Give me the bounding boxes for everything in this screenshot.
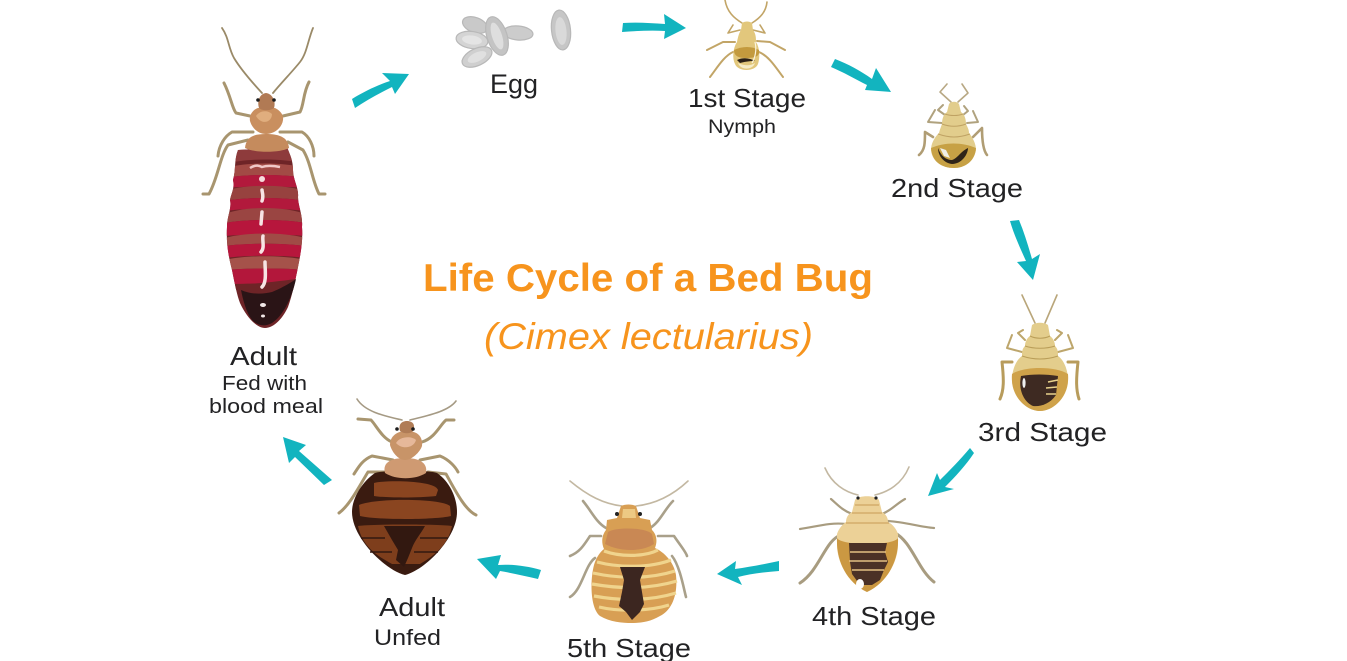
label: 3rd Stage: 3rd Stage — [978, 417, 1107, 447]
label: 2nd Stage: 2nd Stage — [891, 173, 1023, 203]
stage: 5th stage — [567, 481, 691, 661]
label: Adult: Adult — [379, 592, 446, 622]
arrow: 3rd stage to 4th stage — [928, 448, 974, 496]
stage: egg — [455, 9, 573, 99]
label: Unfed: Unfed — [374, 625, 441, 650]
stage: 3rd stage — [978, 295, 1107, 447]
stage: 2nd stage — [891, 84, 1023, 203]
label: Egg: Egg — [490, 69, 538, 99]
arrow: egg to 1st stage — [622, 14, 686, 39]
icon: egg cluster and single egg — [455, 9, 573, 71]
icon: unfed adult bed bug — [339, 399, 476, 575]
icon: 5th stage nymph — [570, 481, 688, 623]
label: 1st Stage: 1st Stage — [688, 83, 806, 113]
label: Nymph: Nymph — [708, 117, 776, 138]
label: blood meal: blood meal — [209, 396, 323, 418]
subtitle: scientific name: (Cimex lectularius) — [484, 316, 813, 357]
arrow: 4th stage to 5th stage — [717, 561, 779, 585]
label: Fed with: Fed with — [222, 373, 307, 395]
arrow: 2nd stage to 3rd stage — [1010, 220, 1040, 280]
icon: 2nd stage nymph — [919, 84, 987, 168]
label: 4th Stage: 4th Stage — [812, 601, 936, 631]
stage: adult unfed — [339, 399, 476, 650]
stage: 4th stage — [800, 467, 936, 631]
icon: 4th stage nymph — [800, 467, 934, 592]
icon: 1st stage nymph — [707, 0, 785, 77]
arrow: 1st stage to 2nd stage — [831, 59, 891, 92]
icon: 3rd stage nymph — [1000, 295, 1079, 411]
stage: adult fed with blood meal — [203, 28, 325, 418]
stage: 1st stage nymph — [688, 0, 806, 138]
arrow: adult to egg — [352, 73, 409, 108]
icon: fed adult bed bug — [203, 28, 325, 328]
title: Life Cycle of a Bed Bug — [423, 257, 873, 300]
arrow: 5th stage to adult unfed — [477, 555, 541, 579]
arrow: adult unfed to adult fed — [283, 437, 332, 485]
label: Adult: Adult — [230, 341, 298, 371]
